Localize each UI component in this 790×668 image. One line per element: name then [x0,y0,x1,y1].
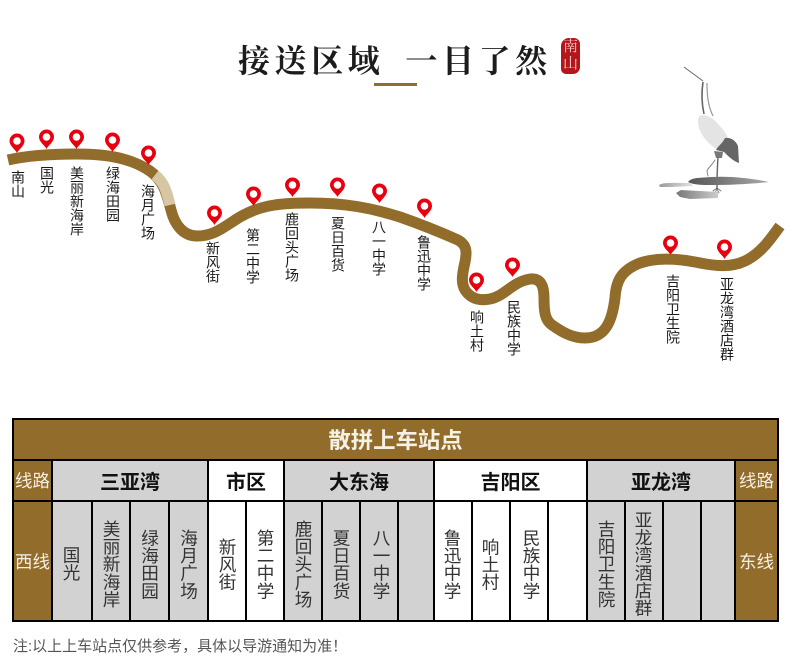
row header: 线路 left [14,461,51,500]
stop: 响土村: 响土村 [480,538,500,590]
table heading [14,420,777,459]
station label: 第二中学: 第二中学 [245,228,261,284]
stop: 美丽新海岸 [93,502,129,620]
stop: empty [399,502,433,620]
stop: 八一中学 [361,502,397,620]
stop: 国光 [53,502,91,620]
area: 大东海: 大东海 [329,472,389,494]
stop: 响土村 [473,502,509,620]
legs [707,158,721,193]
seal: 南山 [561,38,580,74]
wing [716,138,739,163]
stop: 八一中学: 八一中学 [371,529,391,599]
table heading: 散拼上车站点 [328,428,463,452]
stop: 鲁迅中学: 鲁迅中学 [442,529,462,599]
title underline [374,83,417,86]
area: 市区: 市区 [226,472,266,494]
area: 吉阳区: 吉阳区 [480,472,540,494]
title: 接送区域 一目了然 [238,43,552,79]
beak [684,67,703,81]
stop: 吉阳卫生院: 吉阳卫生院 [596,520,616,608]
area: 三亚湾 [53,461,207,500]
row header: 线路 right: 线路 [739,471,774,491]
stop: 亚龙湾酒店群: 亚龙湾酒店群 [633,511,653,617]
station label: 吉阳卫生院: 吉阳卫生院 [665,274,681,344]
stop: 第二中学 [247,502,283,620]
area: 市区 [209,461,283,500]
area: 吉阳区 [435,461,586,500]
stop: 海月广场 [170,502,207,620]
station label: 八一中学: 八一中学 [371,220,387,276]
stop: empty [549,502,586,620]
station label: 国光: 国光 [39,166,55,194]
stop: 民族中学 [511,502,547,620]
station label: 美丽新海岸: 美丽新海岸 [69,166,85,236]
stop: 新风街: 新风街 [217,538,237,590]
area: 亚龙湾 [588,461,734,500]
station label: 夏日百货: 夏日百货 [330,216,346,272]
station label: 响土村: 响土村 [469,310,485,352]
stop: 绿海田园 [131,502,168,620]
pickup stations table [12,418,779,622]
stop: 第二中学: 第二中学 [255,529,275,599]
neck [702,82,704,114]
reeds [688,177,769,185]
body [698,115,729,150]
stop: empty [702,502,734,620]
area: 三亚湾: 三亚湾 [100,472,160,494]
station label: 民族中学: 民族中学 [506,300,522,356]
stop: 民族中学: 民族中学 [521,529,541,599]
stop: 吉阳卫生院 [588,502,624,620]
stop: 亚龙湾酒店群 [626,502,662,620]
stop: 新风街 [209,502,245,620]
row header: 线路 right [736,461,777,500]
station label: 绿海田园: 绿海田园 [105,166,121,222]
row header: 西线: 西线 [15,552,50,572]
illustration: ink crane [659,66,768,199]
seal: 南山: 南 [563,39,578,55]
station label: 鲁迅中学: 鲁迅中学 [416,235,432,291]
stop: empty [664,502,700,620]
stop: 国光: 国光 [61,546,81,582]
stop: 海月广场: 海月广场 [178,529,198,599]
stop: 绿海田园: 绿海田园 [140,529,160,599]
stop: 鹿回头广场 [285,502,321,620]
station label: 新风街: 新风街 [205,241,221,283]
station label: 鹿回头广场: 鹿回头广场 [284,212,300,282]
station label: 海月广场: 海月广场 [140,184,156,240]
route highlight [155,175,170,205]
row header: 线路 left: 线路 [15,471,50,491]
row header: 东线 [736,502,777,620]
stop: 夏日百货: 夏日百货 [331,529,351,599]
area: 亚龙湾: 亚龙湾 [631,472,691,494]
station label: 南山: 南山 [10,170,26,198]
stop: 夏日百货 [323,502,359,620]
stop: 鹿回头广场: 鹿回头广场 [293,520,313,608]
stop: 美丽新海岸: 美丽新海岸 [101,520,121,608]
route line [6,148,784,344]
footnote: 注:以上上车站点仅供参考，具体以导游通知为准！ [13,638,347,655]
map pins [10,130,732,292]
station label: 亚龙湾酒店群: 亚龙湾酒店群 [719,277,735,361]
row header: 东线: 东线 [739,552,774,572]
stop: 鲁迅中学 [435,502,471,620]
seal: 南山: 山 [563,56,578,72]
area: 大东海 [285,461,433,500]
row header: 西线 [14,502,51,620]
